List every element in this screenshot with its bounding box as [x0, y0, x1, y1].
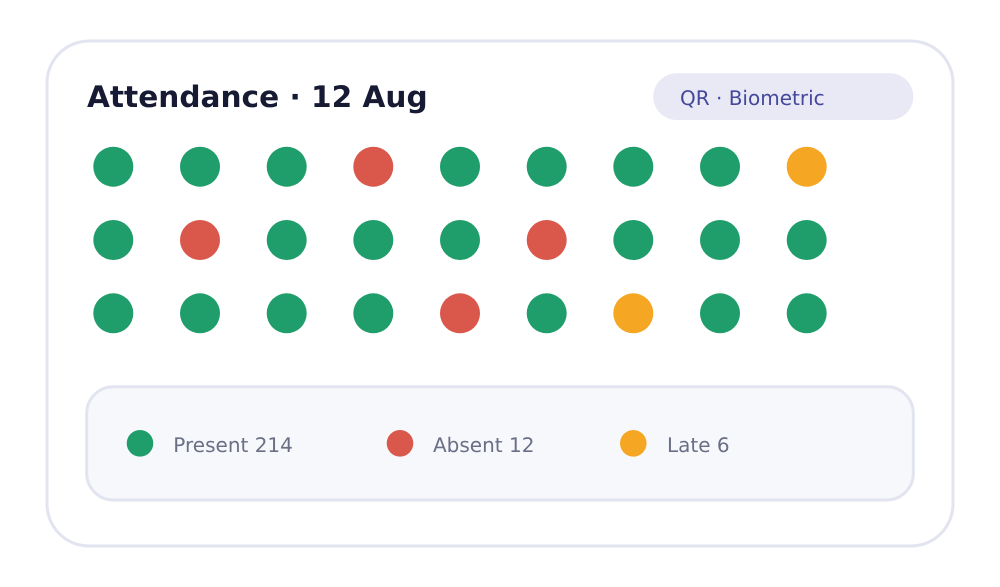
- panel: legend: [87, 387, 913, 500]
- legend item: present: [127, 430, 293, 457]
- title: Attendance · 12 Aug: [87, 80, 428, 114]
- legend item: absent: Absent 12: [433, 433, 534, 457]
- legend item: late: [620, 430, 730, 457]
- row 3: [93, 293, 827, 333]
- row 1: [93, 147, 827, 187]
- legend item: late: Late 6: [667, 433, 730, 457]
- row 2: [93, 220, 827, 260]
- legend item: absent: [387, 430, 534, 457]
- badge: QR and Biometric: QR · Biometric: [680, 86, 825, 110]
- panel: card: [47, 41, 953, 546]
- badge: QR and Biometric: [653, 73, 913, 120]
- legend item: present: Present 214: [173, 433, 293, 457]
- attendance dot grid: [93, 147, 827, 333]
